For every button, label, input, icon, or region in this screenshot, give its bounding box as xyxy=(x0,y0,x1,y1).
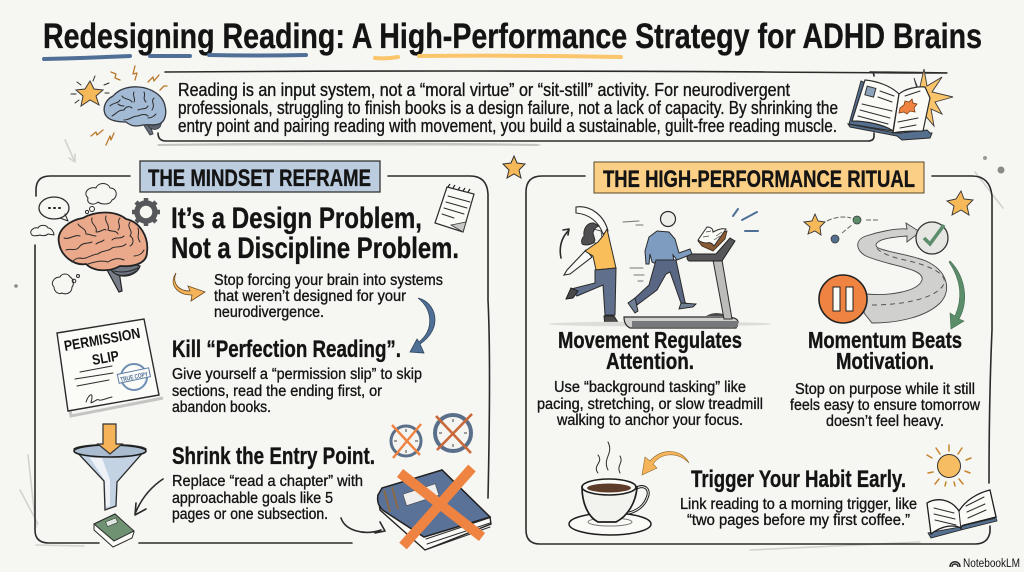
heading: the mindset reframe: THE MINDSET REFRAME xyxy=(148,165,371,192)
text: shrink the entry point: pages or one subsection. xyxy=(172,506,328,523)
star between panels xyxy=(503,156,525,178)
panel: the mindset reframe xyxy=(31,161,491,550)
text: movement regulates attention xyxy=(537,327,763,429)
intro paragraph: entry point and pairing reading with movement, you build a sustainable, guilt-free reading muscle. xyxy=(178,116,837,136)
icon: sun xyxy=(927,445,971,486)
text: momentum beats motivation: Stop on purpose while it still xyxy=(795,381,975,398)
icon: funnel xyxy=(74,424,146,510)
icon: crossed-out clocks xyxy=(391,414,472,458)
text: shrink the entry point xyxy=(172,443,375,523)
heading: the high-performance ritual: THE HIGH-PERFORMANCE RITUAL xyxy=(603,166,915,193)
icon: gear xyxy=(132,198,160,226)
text: shrink the entry point: approachable goals like 5 xyxy=(172,490,333,507)
intro paragraph: professionals, struggling to finish books is a design failure, not a lack of capacity. By shrinking the xyxy=(178,98,838,118)
icon: permission slip xyxy=(57,319,163,416)
text: shrink the entry point: Replace “read a chapter” with xyxy=(172,473,363,490)
icon: winding road with pause button xyxy=(804,191,973,329)
arrow: blue curve xyxy=(410,298,435,353)
text: movement regulates attention: pacing, stretching, or slow treadmill xyxy=(537,396,763,413)
text: kill perfection reading: sections, read the ending first, or xyxy=(172,383,382,400)
text: movement regulates attention: walking to anchor your focus. xyxy=(556,412,743,429)
text: movement regulates attention: Attention. xyxy=(606,348,694,374)
text: kill perfection reading xyxy=(172,336,422,416)
panel: the high-performance ritual xyxy=(526,162,997,544)
icon: notepad xyxy=(435,184,474,232)
text: trigger your habit early xyxy=(680,466,917,529)
icon: open book with burst xyxy=(848,69,953,140)
icon: woman stretching xyxy=(560,207,619,325)
text: stop forcing: neurodivergence. xyxy=(214,304,324,321)
title underlines xyxy=(44,55,621,59)
arrow: grey to green book xyxy=(135,479,163,515)
icon: crossed-out big book xyxy=(378,468,491,550)
text: trigger your habit early: “two pages before my first coffee.” xyxy=(687,512,910,529)
icon: open book xyxy=(927,490,997,538)
text: momentum beats motivation: doesn’t feel heavy. xyxy=(826,413,944,430)
text: trigger your habit early: Link reading to a morning trigger, like xyxy=(680,496,917,513)
intro text box xyxy=(158,71,947,141)
icon: permission slip: SLIP xyxy=(91,348,121,369)
text: stop forcing: that weren’t designed for your xyxy=(214,288,406,305)
text: movement regulates attention: Use “background tasking” like xyxy=(554,379,746,396)
icon: permission slip: TRUE COPY xyxy=(120,371,149,384)
headline: design problem: It’s a Design Problem, xyxy=(171,202,422,235)
headline: design problem xyxy=(171,202,459,265)
text: shrink the entry point: Shrink the Entry Point. xyxy=(172,443,375,470)
intro paragraph: Reading is an input system, not a “moral virtue” or “sit-still” activity. For neurodivergent xyxy=(178,80,790,100)
icon: permission slip: PERMISSION xyxy=(63,326,142,355)
icon: large brain with thought bubbles xyxy=(31,184,147,294)
text: stop forcing xyxy=(214,272,443,321)
text: momentum beats motivation xyxy=(790,327,981,430)
headline: design problem: Not a Discipline Problem. xyxy=(171,232,459,265)
icon: blue brain with sparks xyxy=(71,66,167,145)
icon: man on treadmill xyxy=(548,209,772,328)
intro paragraph xyxy=(178,80,838,136)
heading: the mindset reframe xyxy=(140,161,380,192)
arrow: orange curve xyxy=(173,273,205,301)
text: trigger your habit early: Trigger Your Habit Early. xyxy=(691,466,906,493)
arrow: grey to big book xyxy=(341,518,385,533)
text: kill perfection reading: Give yourself a “permission slip” to skip xyxy=(172,366,422,383)
text: momentum beats motivation: feels easy to ensure tomorrow xyxy=(790,397,981,414)
arrow: orange to coffee xyxy=(642,451,689,475)
text: movement regulates attention: Movement Regulates xyxy=(558,327,742,353)
text: momentum beats motivation: Momentum Beats xyxy=(808,327,962,353)
text: stop forcing: Stop forcing your brain into systems xyxy=(214,272,443,289)
heading: the high-performance ritual xyxy=(594,162,924,193)
text: kill perfection reading: abandon books. xyxy=(172,399,271,416)
icon: coffee cup xyxy=(569,442,651,535)
icon: green book xyxy=(94,514,134,547)
text: kill perfection reading: Kill “Perfection Reading”. xyxy=(172,336,401,363)
text: momentum beats motivation: Motivation. xyxy=(836,348,934,374)
